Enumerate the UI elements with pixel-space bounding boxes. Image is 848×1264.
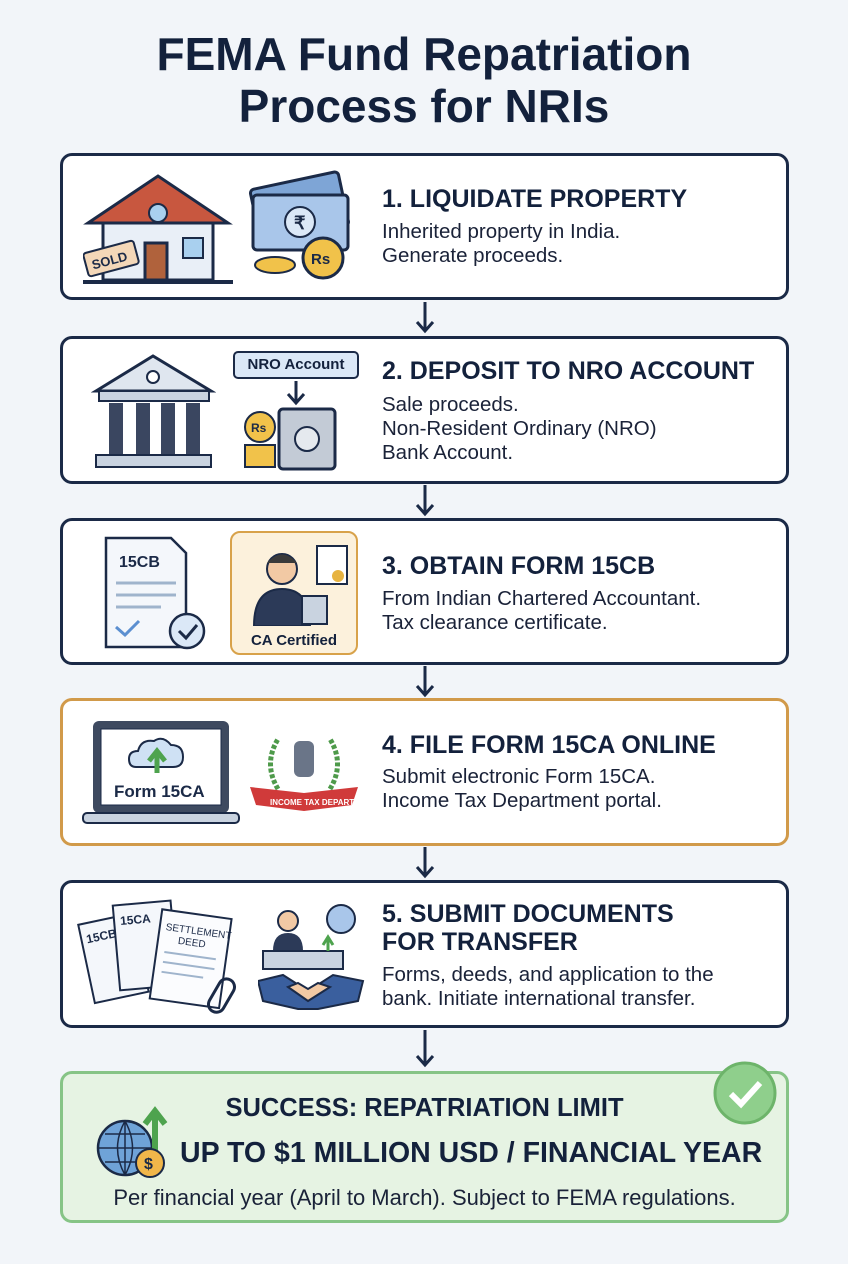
text 3: Tax clearance certificate. <box>382 611 608 634</box>
text 4: Income Tax Department portal. <box>382 789 662 812</box>
arrow 5 <box>416 1030 434 1068</box>
icon: documents <box>77 900 236 1014</box>
highlight: limit: UP TO $1 MILLION USD / FINANCIAL YEAR <box>180 1137 762 1169</box>
icon: money <box>249 170 350 280</box>
text: note: Per financial year (April to March). Subject to FEMA regulations. <box>113 1185 736 1210</box>
icon: documents: 15CA <box>120 911 152 928</box>
heading: success: SUCCESS: REPATRIATION LIMIT <box>225 1094 624 1122</box>
icon: bank handshake <box>258 904 364 1010</box>
title: Process for NRIs <box>239 80 609 132</box>
heading 5: FOR TRANSFER <box>382 928 578 956</box>
panel: step 3 <box>60 518 789 665</box>
icon: CA certified <box>230 531 358 655</box>
icon: documents: SETTLEMENT <box>165 922 232 942</box>
heading 1: 1. LIQUIDATE PROPERTY <box>382 185 687 213</box>
icon: bank <box>91 354 216 468</box>
icon: CA certified: CA Certified <box>251 632 337 649</box>
text 5: Forms, deeds, and application to the <box>382 963 714 986</box>
panel: step 4 <box>60 698 789 846</box>
text 2 <box>382 393 657 464</box>
title: FEMA Fund Repatriation <box>157 28 691 80</box>
text 2: Non-Resident Ordinary (NRO) <box>382 417 657 440</box>
text 2: Bank Account. <box>382 441 513 464</box>
arrow 3 <box>416 666 434 698</box>
text 3: From Indian Chartered Accountant. <box>382 587 701 610</box>
icon: income tax department emblem <box>250 738 360 811</box>
text 2: Sale proceeds. <box>382 393 519 416</box>
text 1: Inherited property in India. <box>382 220 620 243</box>
icon: globe dollar: $ <box>144 1156 153 1173</box>
icon: globe dollar <box>96 1106 168 1178</box>
panel: step 5 <box>60 880 789 1028</box>
icon: NRO account safe <box>233 351 359 470</box>
text 5 <box>382 963 714 1010</box>
panel: success <box>60 1071 789 1223</box>
icon: laptop form 15CA <box>82 721 240 824</box>
panel: step 2 <box>60 336 789 484</box>
arrow 1 <box>416 302 434 334</box>
title <box>157 28 691 132</box>
icon: documents: DEED <box>177 936 206 951</box>
icon: NRO account safe: NRO Account <box>248 356 344 373</box>
text 3 <box>382 587 701 634</box>
arrow 4 <box>416 847 434 878</box>
text 5: bank. Initiate international transfer. <box>382 987 695 1010</box>
text 1 <box>382 220 620 267</box>
icon: money: ₹ <box>294 213 306 233</box>
heading 5: 5. SUBMIT DOCUMENTS <box>382 900 674 928</box>
text 1: Generate proceeds. <box>382 244 563 267</box>
icon: house sold <box>83 174 233 284</box>
icon: documents: 15CB <box>85 926 118 946</box>
heading 2: 2. DEPOSIT TO NRO ACCOUNT <box>382 357 754 385</box>
icon: money: Rs <box>311 251 330 268</box>
text 4 <box>382 765 662 812</box>
arrow 2 <box>416 485 434 516</box>
heading 3: 3. OBTAIN FORM 15CB <box>382 552 655 580</box>
panel: step 1 <box>60 153 789 300</box>
heading 4: 4. FILE FORM 15CA ONLINE <box>382 731 716 759</box>
icon: laptop form 15CA: Form 15CA <box>114 782 205 801</box>
icon: house sold: SOLD <box>90 249 129 272</box>
icon: form 15CB <box>104 536 206 650</box>
icon: form 15CB: 15CB <box>119 554 160 571</box>
icon: check badge <box>714 1062 776 1124</box>
icon: NRO account safe: Rs <box>251 421 267 435</box>
heading 5 <box>382 900 674 956</box>
text 4: Submit electronic Form 15CA. <box>382 765 655 788</box>
